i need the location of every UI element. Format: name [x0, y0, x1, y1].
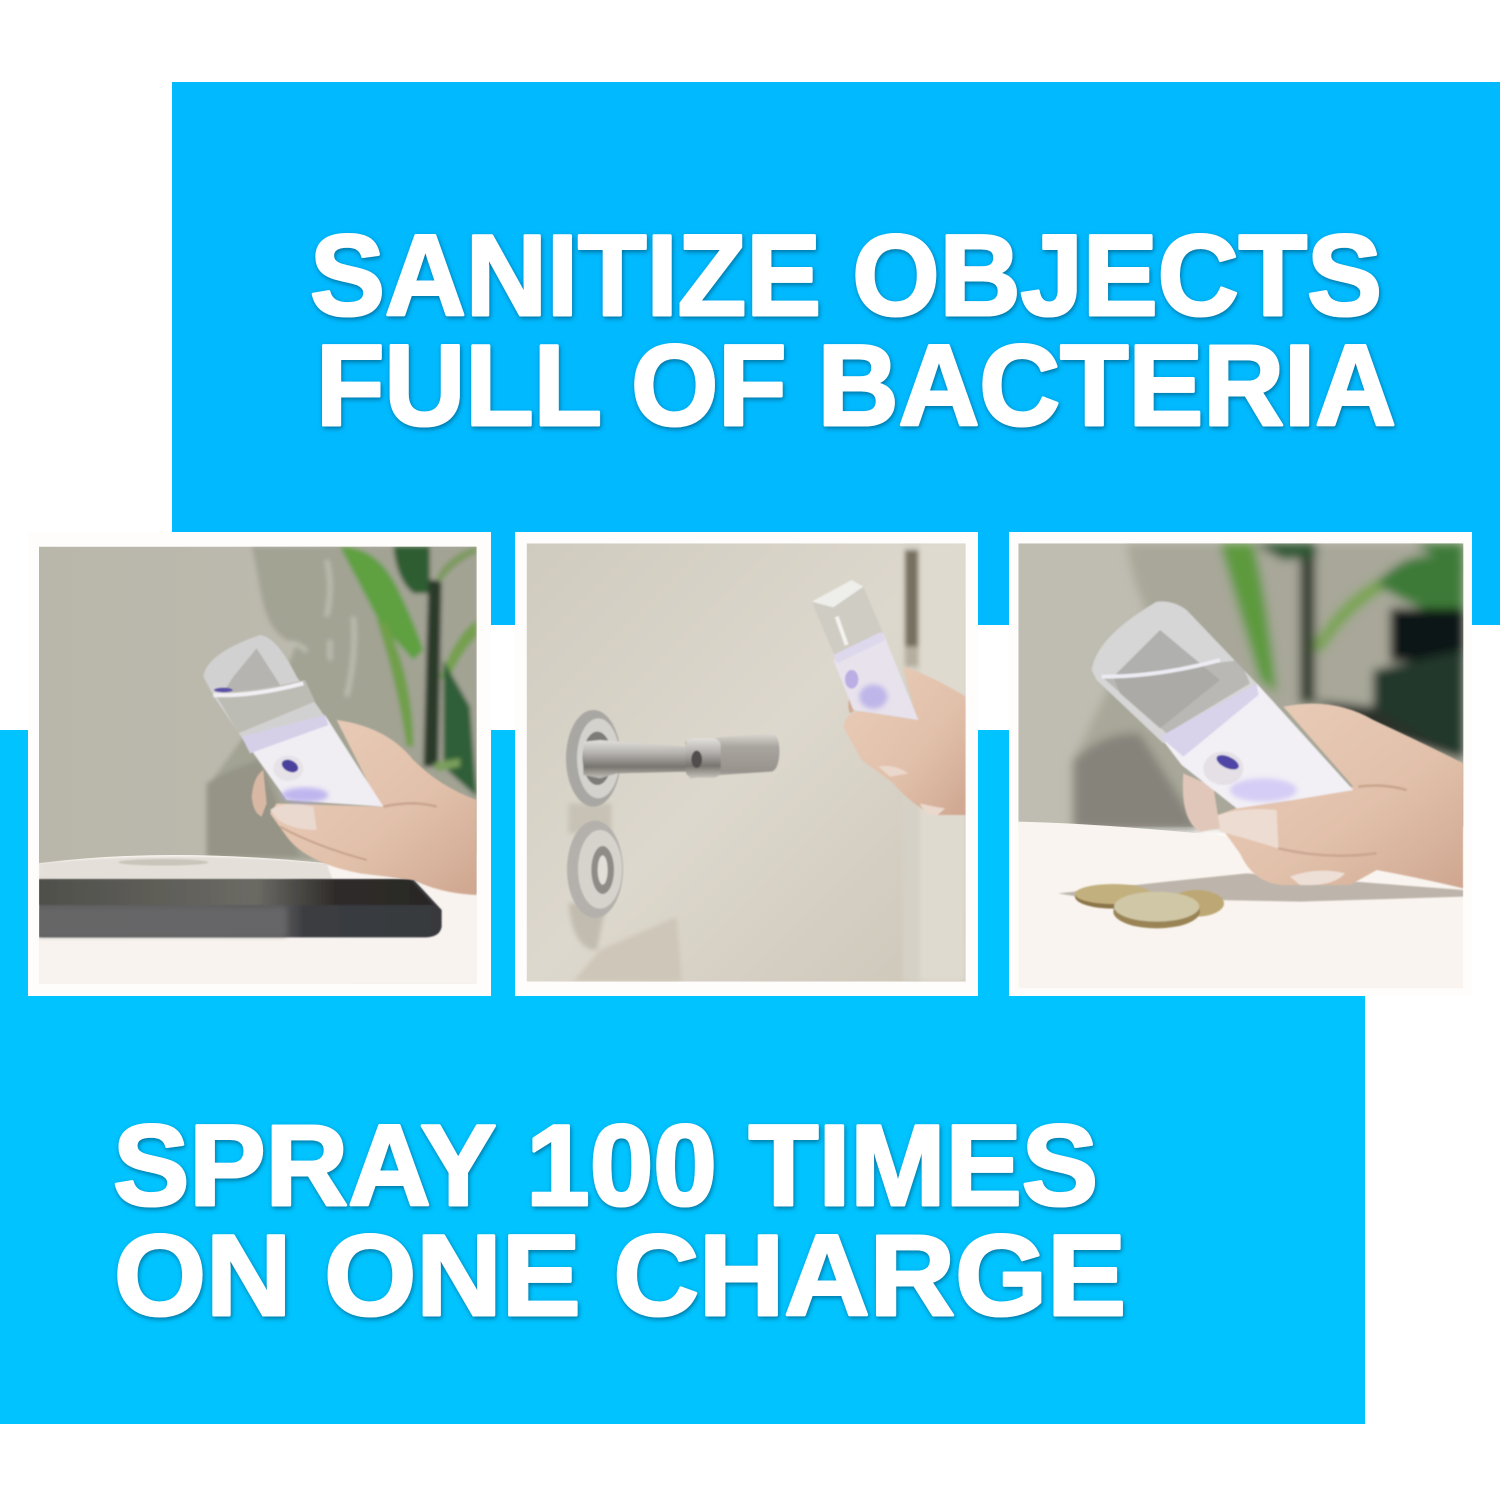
photo: mist sprayer over phone	[39, 547, 477, 983]
photo: mist sprayer over coins	[1018, 543, 1463, 988]
hand	[1213, 704, 1463, 888]
coins	[1074, 895, 1116, 910]
heading: spray 100 times on one charge: SPRAY 100 TIMES	[113, 1102, 1098, 1230]
table	[39, 855, 477, 983]
upper rosette	[566, 710, 621, 807]
lever	[583, 740, 687, 778]
heading: sanitize objects full of bacteria	[310, 212, 1396, 450]
panel: photo frame, door handle	[515, 532, 978, 996]
hand	[203, 635, 477, 895]
barrel	[685, 733, 779, 778]
panel: photo frame, phone	[28, 532, 491, 996]
heading: spray 100 times on one charge: ON ONE CHARGE	[114, 1212, 1126, 1340]
phone	[39, 879, 442, 937]
bottle	[833, 633, 918, 720]
heading: spray 100 times on one charge	[113, 1102, 1126, 1340]
photo: mist sprayer at door handle	[527, 543, 966, 982]
table	[1018, 822, 1463, 988]
hand	[843, 667, 966, 815]
bottle	[1160, 683, 1353, 808]
panel: top blue banner	[172, 82, 1500, 625]
bottle	[242, 715, 383, 807]
panel: bottom blue banner	[0, 730, 1365, 1424]
shadow	[1058, 873, 1463, 903]
heading: sanitize objects full of bacteria: SANITIZE OBJECTS	[310, 212, 1382, 340]
lower rosette	[567, 821, 623, 918]
panel: photo frame, coins	[1009, 532, 1472, 996]
heading: sanitize objects full of bacteria: FULL OF BACTERIA	[316, 322, 1396, 450]
